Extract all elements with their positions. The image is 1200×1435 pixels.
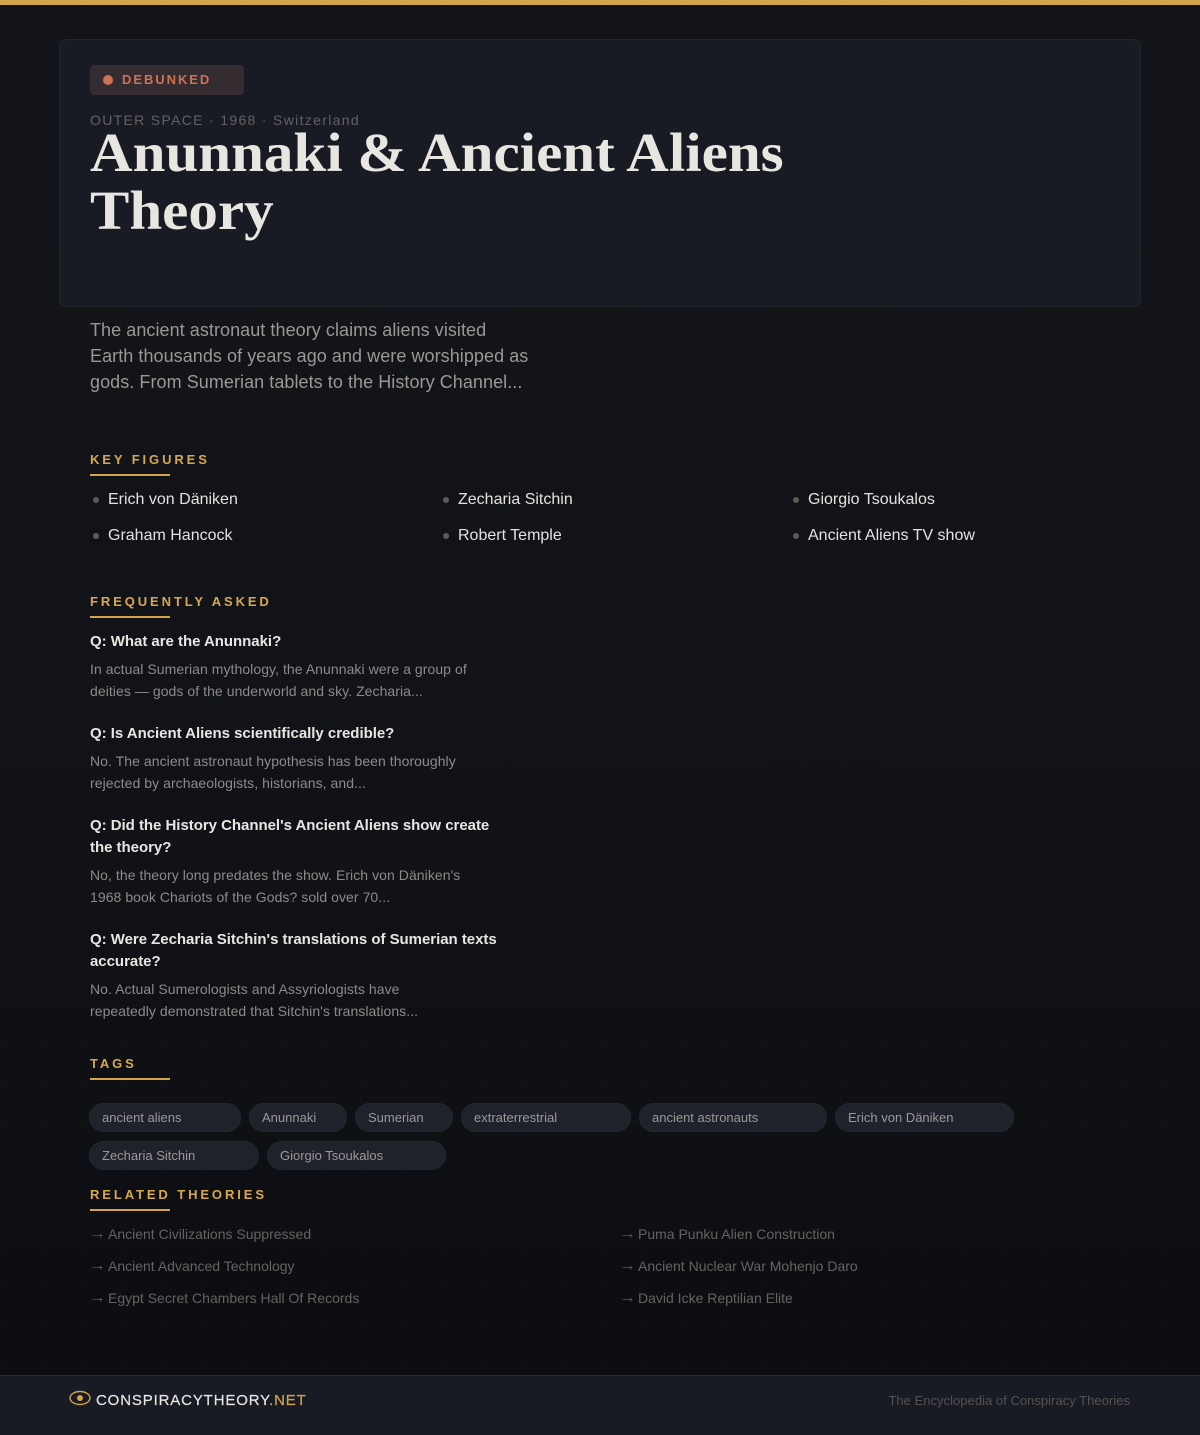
summary text: Earth thousands of years ago and were worshipped as [90, 346, 528, 366]
related link: Ancient Civilizations Suppressed [108, 1226, 311, 1242]
tag: Giorgio Tsoukalos [280, 1148, 383, 1163]
faq answer 4: repeatedly demonstrated that Sitchin's translations... [90, 1003, 418, 1019]
tag: Erich von Däniken [848, 1110, 954, 1125]
faq answer 2: No. The ancient astronaut hypothesis has been thoroughly [90, 753, 456, 769]
icon: eye logo [69, 1390, 91, 1406]
related theories list [89, 1225, 858, 1306]
figure: Zecharia Sitchin [458, 491, 573, 508]
figure: Giorgio Tsoukalos [808, 491, 935, 508]
status badge: debunked [90, 65, 244, 95]
tag: ancient aliens [102, 1110, 182, 1125]
panel: key figures list [93, 491, 975, 544]
figure: Erich von Däniken [108, 491, 238, 508]
faq question 3: Q: Did the History Channel's Ancient Aliens show create [90, 817, 489, 834]
title: Theory [90, 180, 274, 241]
figure: Ancient Aliens TV show [808, 527, 975, 544]
tag [355, 1103, 453, 1132]
related link: → [619, 1257, 636, 1273]
faq question 3: the theory? [90, 839, 171, 856]
panel: hero header [59, 39, 1141, 307]
faq answer 2: rejected by archaeologists, historians, and... [90, 775, 366, 791]
related link: Ancient Nuclear War Mohenjo Daro [638, 1258, 858, 1274]
faq question 4: Q: Were Zecharia Sitchin's translations of Sumerian texts [90, 931, 497, 948]
footer [0, 1375, 1200, 1435]
tag: Anunnaki [262, 1110, 316, 1125]
faq answer 3: No, the theory long predates the show. Erich von Däniken's [90, 867, 460, 883]
faq answer 3: 1968 book Chariots of the Gods? sold over 70... [90, 889, 390, 905]
faq answer 4: No. Actual Sumerologists and Assyriologists have [90, 981, 399, 997]
related link: → [89, 1289, 106, 1305]
summary text [90, 320, 528, 392]
tag [835, 1103, 1014, 1132]
faq answer 4 [90, 981, 418, 1019]
faq question 2: Q: Is Ancient Aliens scientifically credible? [90, 725, 394, 742]
tag: Zecharia Sitchin [102, 1148, 195, 1163]
faq question 4: accurate? [90, 953, 161, 970]
faq question 1: Q: What are the Anunnaki? [90, 633, 281, 650]
meta line: OUTER SPACE · 1968 · Switzerland [90, 112, 360, 128]
faq answer 1: In actual Sumerian mythology, the Anunnaki were a group of [90, 661, 467, 677]
related link: → [89, 1257, 106, 1273]
faq answer 3 [90, 867, 460, 905]
related link: David Icke Reptilian Elite [638, 1290, 793, 1306]
faq answer 1 [90, 661, 467, 699]
heading: frequently asked: FREQUENTLY ASKED [90, 594, 272, 609]
top accent bar [0, 0, 1200, 5]
tag: extraterrestrial [474, 1110, 557, 1125]
tag: Sumerian [368, 1110, 424, 1125]
faq question 4 [90, 931, 497, 970]
faq answer 2 [90, 753, 456, 791]
heading: related theories: RELATED THEORIES [90, 1187, 267, 1202]
figure: Graham Hancock [108, 527, 232, 544]
tag [89, 1141, 259, 1170]
title: Anunnaki & Ancient Aliens [90, 122, 784, 183]
faq answer 1: deities — gods of the underworld and sky. Zecharia... [90, 683, 423, 699]
heading: tags: TAGS [90, 1056, 137, 1071]
logo wordmark: CONSPIRACYTHEORY.NET [96, 1392, 307, 1409]
related link: Puma Punku Alien Construction [638, 1226, 835, 1242]
related link: Egypt Secret Chambers Hall Of Records [108, 1290, 359, 1306]
tag [249, 1103, 347, 1132]
tag [89, 1103, 241, 1132]
footer tagline: The Encyclopedia of Conspiracy Theories [888, 1393, 1130, 1408]
tag [461, 1103, 631, 1132]
tag: ancient astronauts [652, 1110, 758, 1125]
summary text: The ancient astronaut theory claims aliens visited [90, 320, 486, 340]
related link: Ancient Advanced Technology [108, 1258, 295, 1274]
figure: Robert Temple [458, 527, 562, 544]
related link: → [619, 1225, 636, 1241]
tag [639, 1103, 827, 1132]
faq question 3 [90, 817, 489, 856]
title [90, 122, 784, 241]
heading: key figures: KEY FIGURES [90, 452, 210, 467]
status badge: debunked: DEBUNKED [122, 72, 211, 87]
related link: → [89, 1225, 106, 1241]
related link: → [619, 1289, 636, 1305]
tag list [89, 1103, 1014, 1170]
summary text: gods. From Sumerian tablets to the History Channel... [90, 372, 522, 392]
tag [267, 1141, 446, 1170]
